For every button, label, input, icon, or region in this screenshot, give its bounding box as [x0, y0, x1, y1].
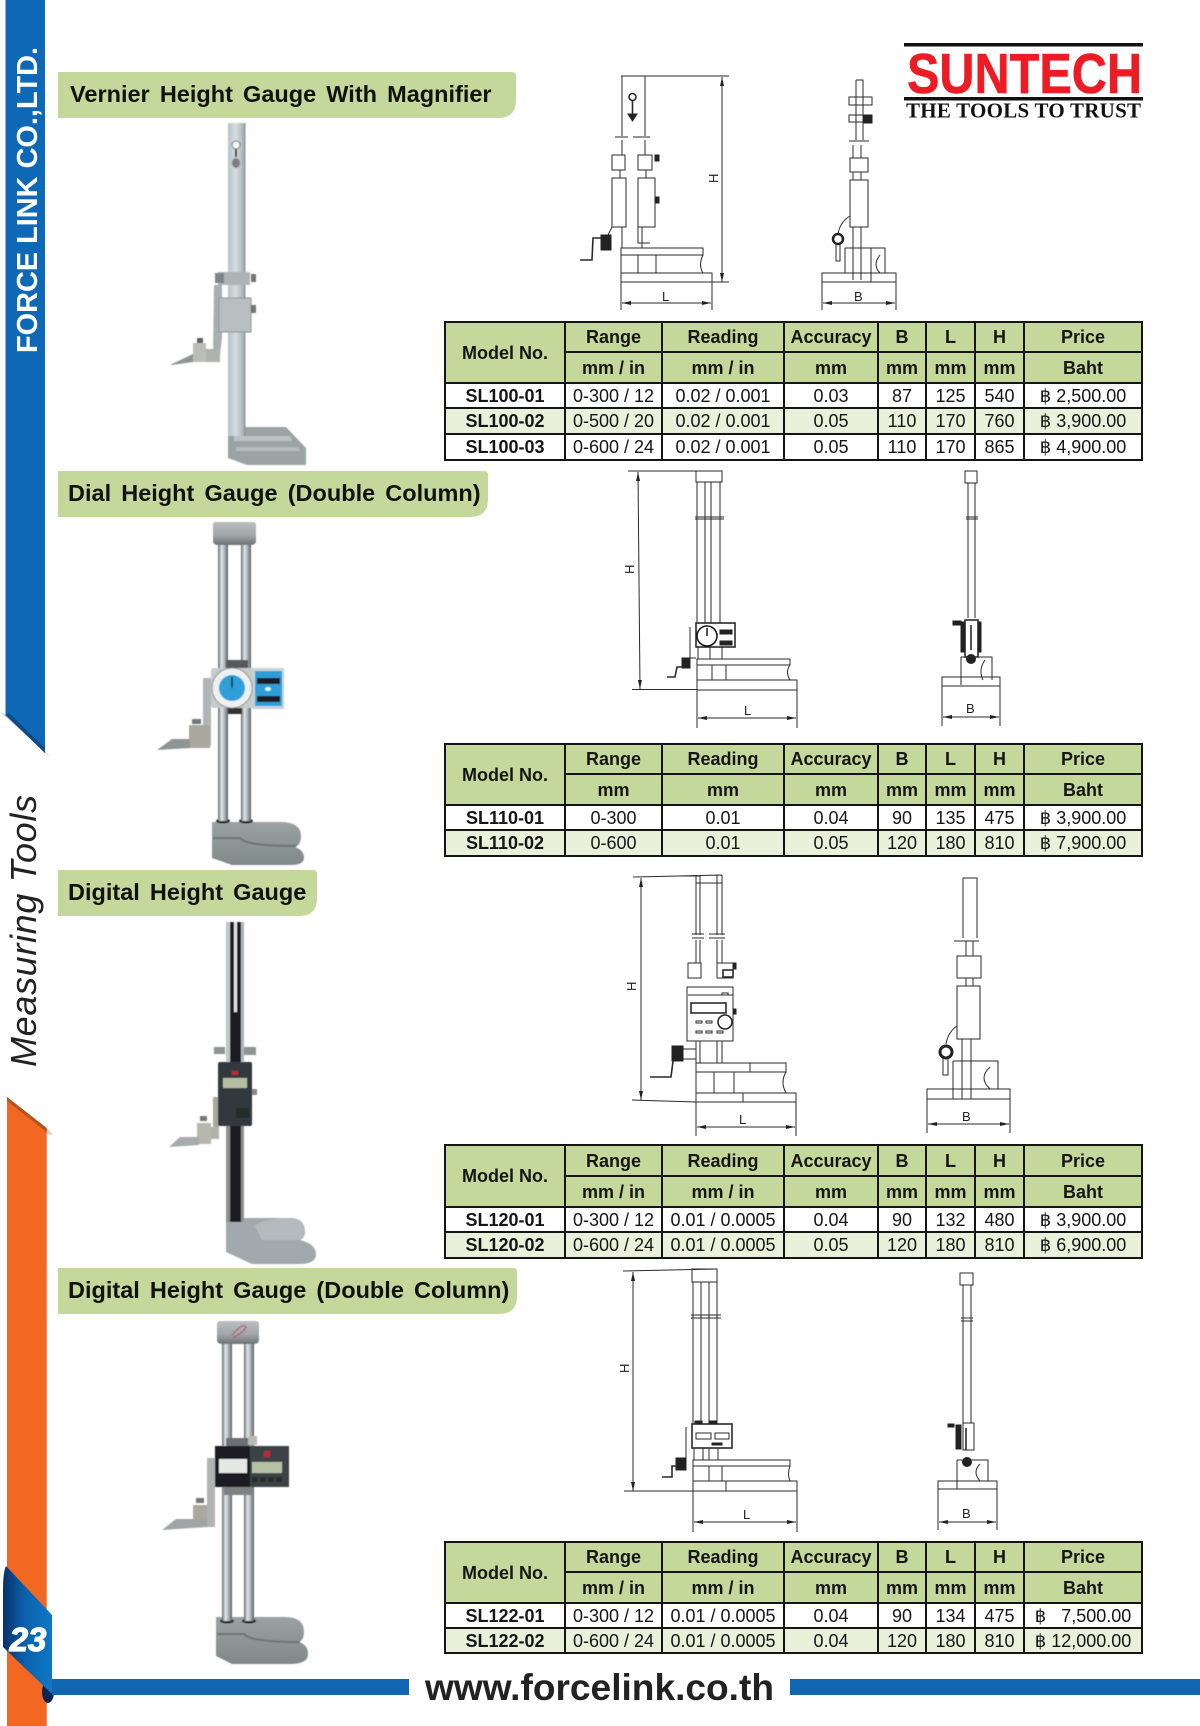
sidebar: orange ribbon — [7, 1097, 53, 1726]
table: SL122 series: mm — [886, 1578, 918, 1598]
photo: vernier height gauge — [170, 123, 306, 465]
table: SL110 series: mm — [983, 780, 1016, 800]
table: SL110 series: SL110-02 — [466, 833, 544, 853]
table: SL120 series: 0-300 / 12 — [573, 1210, 654, 1230]
table: SL122 series: Price — [1061, 1547, 1105, 1567]
photo: digital double column gauge — [162, 1321, 308, 1664]
drawing: dial gauge front view: L — [744, 703, 751, 718]
table: SL122 series: Model No. — [462, 1562, 548, 1582]
table: SL100 series: mm — [934, 358, 966, 378]
table: SL110 series: 90 — [892, 808, 912, 828]
table: SL122 series: L — [945, 1547, 956, 1567]
table: SL120 series: 480 — [984, 1210, 1015, 1230]
table: SL100 series: SL100-01 — [465, 386, 545, 406]
table: SL100 series: 760 — [984, 411, 1015, 431]
table: SL100 series: SL100-02 — [465, 411, 545, 431]
logo: SUNTECH: THE TOOLS TO TRUST — [906, 98, 1141, 122]
table: SL110 series: 0.05 — [813, 833, 849, 853]
heading: digital — [58, 870, 317, 916]
table: SL120 series: mm — [886, 1182, 918, 1202]
footer bar right — [790, 1679, 1200, 1695]
table: SL100 series: Reading — [687, 327, 758, 347]
sidebar company name: FORCE LINK CO.,LTD. — [12, 47, 44, 353]
table: SL122 series: mm / in — [691, 1578, 754, 1598]
table: SL100 series: 110 — [888, 437, 916, 457]
table: SL110 series: 0.01 — [705, 833, 741, 853]
table: SL100 series: mm — [886, 358, 918, 378]
table: SL120 series: 0.01 / 0.0005 — [670, 1235, 776, 1255]
table: SL110 series: Model No. — [462, 764, 548, 784]
heading: digital double column — [58, 1268, 517, 1314]
table: SL120 series: Accuracy — [790, 1150, 872, 1170]
table: SL110 series: 0.04 — [813, 808, 849, 828]
table: SL110 series: Accuracy — [790, 749, 872, 769]
table: SL122 series: mm — [983, 1578, 1016, 1598]
table: SL120 series: mm / in — [582, 1182, 645, 1202]
table: SL110 series: Baht — [1063, 780, 1103, 800]
sidebar: section name: Measuring Tools — [3, 795, 44, 1067]
logo: SUNTECH — [904, 42, 1143, 122]
table: SL100 series: Baht — [1063, 358, 1103, 378]
table: SL122 series: B — [896, 1547, 908, 1567]
table: SL120 series: 90 — [892, 1210, 912, 1230]
table: SL100 series: 865 — [984, 437, 1015, 457]
table: SL100 series: SL100-03 — [465, 437, 545, 457]
table: SL120 series: 132 — [935, 1210, 966, 1230]
drawing: dial gauge front view — [622, 471, 797, 728]
table: SL120 series: SL120-01 — [465, 1210, 545, 1230]
table: SL120 series: 0.01 / 0.0005 — [670, 1210, 776, 1230]
table: SL100 series: 0.05 — [813, 437, 849, 457]
table: SL100 series: Model No. — [462, 342, 548, 362]
footer bar left — [52, 1679, 409, 1695]
table: SL100 series: 170 — [935, 411, 966, 431]
drawing: digital gauge front view — [624, 875, 796, 1136]
drawing: digital double column side view — [938, 1273, 997, 1530]
table: SL120 series: Price — [1061, 1150, 1105, 1170]
table: SL120 series: ฿ 6,900.00 — [1040, 1235, 1126, 1255]
heading: vernier — [58, 72, 516, 118]
table: SL122 series: SL122-01 — [465, 1606, 545, 1626]
table: SL110 series: Price — [1061, 749, 1105, 769]
table: SL100 series: 540 — [984, 386, 1015, 406]
table: SL122 series: mm — [815, 1578, 847, 1598]
table: SL120 series: Baht — [1063, 1182, 1103, 1202]
table: SL100 series: mm / in — [691, 358, 754, 378]
table: SL120 series: Model No. — [462, 1166, 548, 1186]
drawing: digital gauge side view — [927, 878, 1010, 1133]
table: SL100 series: B — [896, 327, 908, 347]
table: SL122 series: mm / in — [582, 1578, 645, 1598]
sidebar: blue company ribbon — [0, 0, 50, 756]
table: SL122 series: 475 — [984, 1606, 1015, 1626]
table: SL122 series: 0.04 — [813, 1630, 849, 1650]
logo: SUNTECH: SUNTECH — [907, 42, 1142, 106]
table: SL120 series: L — [945, 1150, 956, 1170]
table: SL120 series: mm / in — [691, 1182, 754, 1202]
table: SL122 series: Range — [586, 1547, 641, 1567]
table: SL110 series: SL110-01 — [466, 808, 544, 828]
table: SL100 series: 0-500 / 20 — [573, 411, 654, 431]
table: SL110 series: Range — [586, 749, 641, 769]
table: SL120 series — [444, 1144, 1143, 1259]
heading: vernier: Vernier Height Gauge With Magnifier — [70, 81, 492, 107]
table: SL120 series: ฿ 3,900.00 — [1040, 1210, 1126, 1230]
drawing: dial gauge front view: H — [622, 565, 637, 574]
table: SL122 series: Reading — [687, 1547, 758, 1567]
table: SL100 series: 0-300 / 12 — [573, 386, 654, 406]
table: SL110 series: 0-300 — [590, 808, 637, 828]
table: SL110 series: mm — [597, 780, 630, 800]
table: SL100 series: 0.05 — [813, 411, 849, 431]
table: SL110 series: mm — [886, 780, 918, 800]
table: SL120 series: SL120-02 — [465, 1235, 545, 1255]
table: SL100 series: mm — [983, 358, 1016, 378]
table: SL100 series: 87 — [892, 386, 912, 406]
page number tab — [3, 1566, 54, 1703]
table: SL100 series: 0.03 — [813, 386, 849, 406]
table: SL110 series: 120 — [887, 833, 917, 853]
table: SL100 series: ฿ 3,900.00 — [1040, 411, 1126, 431]
table: SL120 series: mm — [934, 1182, 966, 1202]
table: SL110 series: ฿ 7,900.00 — [1040, 833, 1126, 853]
table: SL100 series: ฿ 4,900.00 — [1040, 437, 1126, 457]
table: SL120 series: 180 — [935, 1235, 966, 1255]
table: SL122 series: 0-300 / 12 — [573, 1606, 654, 1626]
table: SL122 series: SL122-02 — [465, 1630, 545, 1650]
table: SL122 series: H — [993, 1547, 1006, 1567]
drawing: vernier front view: L — [662, 289, 669, 304]
table: SL120 series: H — [993, 1150, 1006, 1170]
drawing: digital gauge side view: B — [962, 1109, 971, 1124]
table: SL110 series: Reading — [687, 749, 758, 769]
table: SL120 series: mm — [815, 1182, 847, 1202]
drawing: digital gauge front view: H — [624, 982, 639, 991]
table: SL100 series: 110 — [888, 411, 916, 431]
drawing: vernier side view: B — [854, 289, 863, 304]
table: SL110 series: 0-600 — [590, 833, 637, 853]
table: SL100 series: 0.02 / 0.001 — [675, 437, 771, 457]
table: SL122 series: 0.04 — [813, 1606, 849, 1626]
drawing: dial gauge side view: B — [966, 701, 975, 716]
table: SL100 series: Price — [1061, 327, 1105, 347]
table: SL110 series: mm — [815, 780, 847, 800]
table: SL120 series: mm — [983, 1182, 1016, 1202]
table: SL100 series: L — [945, 327, 956, 347]
drawing: vernier front view: H — [706, 174, 721, 183]
drawing: vernier front view — [580, 76, 729, 310]
table: SL110 series — [444, 743, 1143, 857]
table: SL122 series: 0.01 / 0.0005 — [670, 1606, 776, 1626]
table: SL122 series: Baht — [1063, 1578, 1103, 1598]
table: SL110 series: B — [896, 749, 908, 769]
table: SL110 series: ฿ 3,900.00 — [1040, 808, 1126, 828]
table: SL122 series: 810 — [984, 1630, 1015, 1650]
table: SL122 series: 0-600 / 24 — [573, 1630, 654, 1650]
table: SL100 series: 0.02 / 0.001 — [675, 386, 771, 406]
table: SL120 series: B — [896, 1150, 908, 1170]
table: SL110 series: 180 — [935, 833, 966, 853]
heading: dial — [58, 471, 488, 517]
table: SL100 series: 125 — [935, 386, 966, 406]
table: SL122 series: ฿ 7,500.00 — [1035, 1606, 1131, 1626]
table: SL100 series: 0-600 / 24 — [573, 437, 654, 457]
table: SL122 series: 120 — [887, 1630, 917, 1650]
table: SL110 series: 0.01 — [705, 808, 741, 828]
table: SL122 series: ฿ 12,000.00 — [1035, 1630, 1131, 1650]
table: SL122 series: 134 — [935, 1606, 966, 1626]
table: SL122 series: Accuracy — [790, 1547, 872, 1567]
table: SL122 series: 90 — [892, 1606, 912, 1626]
heading: digital: Digital Height Gauge — [68, 879, 306, 905]
heading: digital double column: Digital Height Gauge (Double Column) — [68, 1277, 509, 1303]
table: SL100 series — [444, 321, 1143, 461]
table: SL122 series — [444, 1541, 1143, 1654]
table: SL120 series: Range — [586, 1150, 641, 1170]
table: SL100 series: mm — [815, 358, 847, 378]
table: SL110 series: H — [993, 749, 1006, 769]
table: SL100 series: mm / in — [582, 358, 645, 378]
table: SL110 series: L — [945, 749, 956, 769]
drawing: vernier side view — [822, 80, 896, 310]
table: SL100 series: Range — [586, 327, 641, 347]
table: SL110 series: mm — [934, 780, 966, 800]
table: SL120 series: 0.05 — [813, 1235, 849, 1255]
table: SL122 series: mm — [934, 1578, 966, 1598]
table: SL120 series: 810 — [984, 1235, 1015, 1255]
drawing: digital double column front view: H — [617, 1364, 632, 1373]
table: SL100 series: ฿ 2,500.00 — [1040, 386, 1126, 406]
photo: digital height gauge — [169, 922, 316, 1264]
table: SL122 series: 0.01 / 0.0005 — [670, 1630, 776, 1650]
table: SL120 series: 0-600 / 24 — [573, 1235, 654, 1255]
drawing: digital double column front view — [617, 1269, 797, 1532]
page number: 23 — [9, 1621, 46, 1658]
table: SL120 series: 120 — [887, 1235, 917, 1255]
table: SL110 series: 135 — [935, 808, 966, 828]
table: SL100 series: 0.02 / 0.001 — [675, 411, 771, 431]
table: SL122 series: 180 — [935, 1630, 966, 1650]
table: SL100 series: 170 — [935, 437, 966, 457]
table: SL120 series: 0.04 — [813, 1210, 849, 1230]
drawing: digital double column front view: L — [743, 1507, 750, 1522]
drawing: dial gauge side view — [942, 471, 1000, 726]
table: SL100 series: Accuracy — [790, 327, 872, 347]
drawing: digital gauge front view: L — [739, 1112, 746, 1127]
footer website address: www.forcelink.co.th — [424, 1667, 774, 1708]
drawing: digital double column side view: B — [962, 1506, 971, 1521]
table: SL110 series: mm — [707, 780, 739, 800]
table: SL110 series: 810 — [984, 833, 1015, 853]
table: SL110 series: 475 — [984, 808, 1015, 828]
table: SL120 series: Reading — [687, 1150, 758, 1170]
photo: dial height gauge — [157, 522, 304, 865]
table: SL100 series: H — [993, 327, 1006, 347]
heading: dial: Dial Height Gauge (Double Column) — [68, 480, 481, 506]
